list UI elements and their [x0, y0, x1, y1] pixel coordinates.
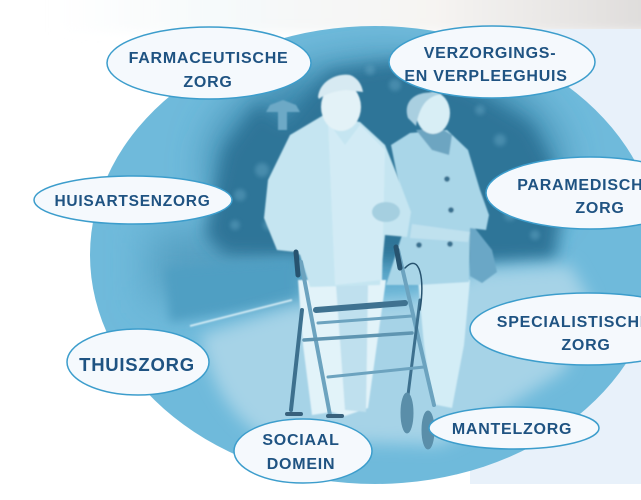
lamp post — [266, 100, 300, 130]
road edge line — [190, 300, 292, 326]
man: jacket — [264, 116, 411, 287]
label: paramedische zorg — [486, 157, 641, 229]
photo background in oval — [150, 60, 590, 445]
label: thuiszorg: THUISZORG — [79, 354, 195, 375]
foliage highlights — [230, 65, 540, 240]
trees backdrop — [150, 60, 560, 300]
large blue oval — [90, 26, 641, 484]
label: mantelzorg: MANTELZORG — [452, 421, 572, 438]
label: verzorgings- en verpleeghuis — [389, 26, 595, 98]
rollator walker — [287, 247, 434, 449]
walker: rear legs — [291, 310, 302, 410]
label: verzorgings- en verpleeghuis: VERZORGINGS- — [424, 45, 556, 62]
woman: coat — [386, 130, 489, 285]
label: verzorgings- en verpleeghuis: EN VERPLEEGHUIS — [404, 68, 568, 85]
label: specialistische zorg — [470, 293, 641, 365]
foliage — [205, 62, 565, 262]
woman: belt — [410, 224, 470, 242]
label: sociaal domein — [234, 419, 372, 483]
walker: frame front — [301, 262, 330, 415]
light blue right panel — [470, 29, 641, 484]
woman: legs — [418, 280, 470, 408]
woman: hair — [407, 92, 442, 126]
pavement — [200, 265, 590, 445]
label: sociaal domein: SOCIAAL — [262, 432, 340, 449]
label: huisartsenzorg: HUISARTSENZORG — [54, 193, 211, 210]
walker: handles and cable — [296, 252, 298, 275]
woman: head — [416, 92, 450, 134]
man: hand — [372, 202, 400, 222]
label: paramedische zorg: ZORG — [575, 200, 625, 217]
road — [165, 258, 295, 322]
woman: bag — [470, 222, 497, 283]
label: sociaal domein: DOMEIN — [267, 456, 335, 473]
walker: rails — [318, 316, 412, 323]
man — [264, 75, 411, 416]
man: head — [321, 83, 361, 131]
man: cap — [318, 75, 363, 99]
label: farmaceutische zorg — [107, 27, 311, 99]
label: mantelzorg — [429, 407, 599, 449]
label: farmaceutische zorg: ZORG — [183, 74, 233, 91]
walker: wheels — [401, 393, 413, 433]
label: specialistische zorg: ZORG — [561, 337, 611, 354]
label: thuiszorg — [67, 329, 209, 395]
woman: buttons — [416, 176, 454, 248]
top background wash — [200, 0, 641, 30]
woman — [386, 92, 497, 408]
label: huisartsenzorg — [34, 176, 232, 224]
man: legs — [298, 280, 386, 416]
woman: scarf — [416, 128, 452, 155]
label: farmaceutische zorg: FARMACEUTISCHE — [129, 50, 288, 67]
walker: seat — [316, 303, 405, 310]
